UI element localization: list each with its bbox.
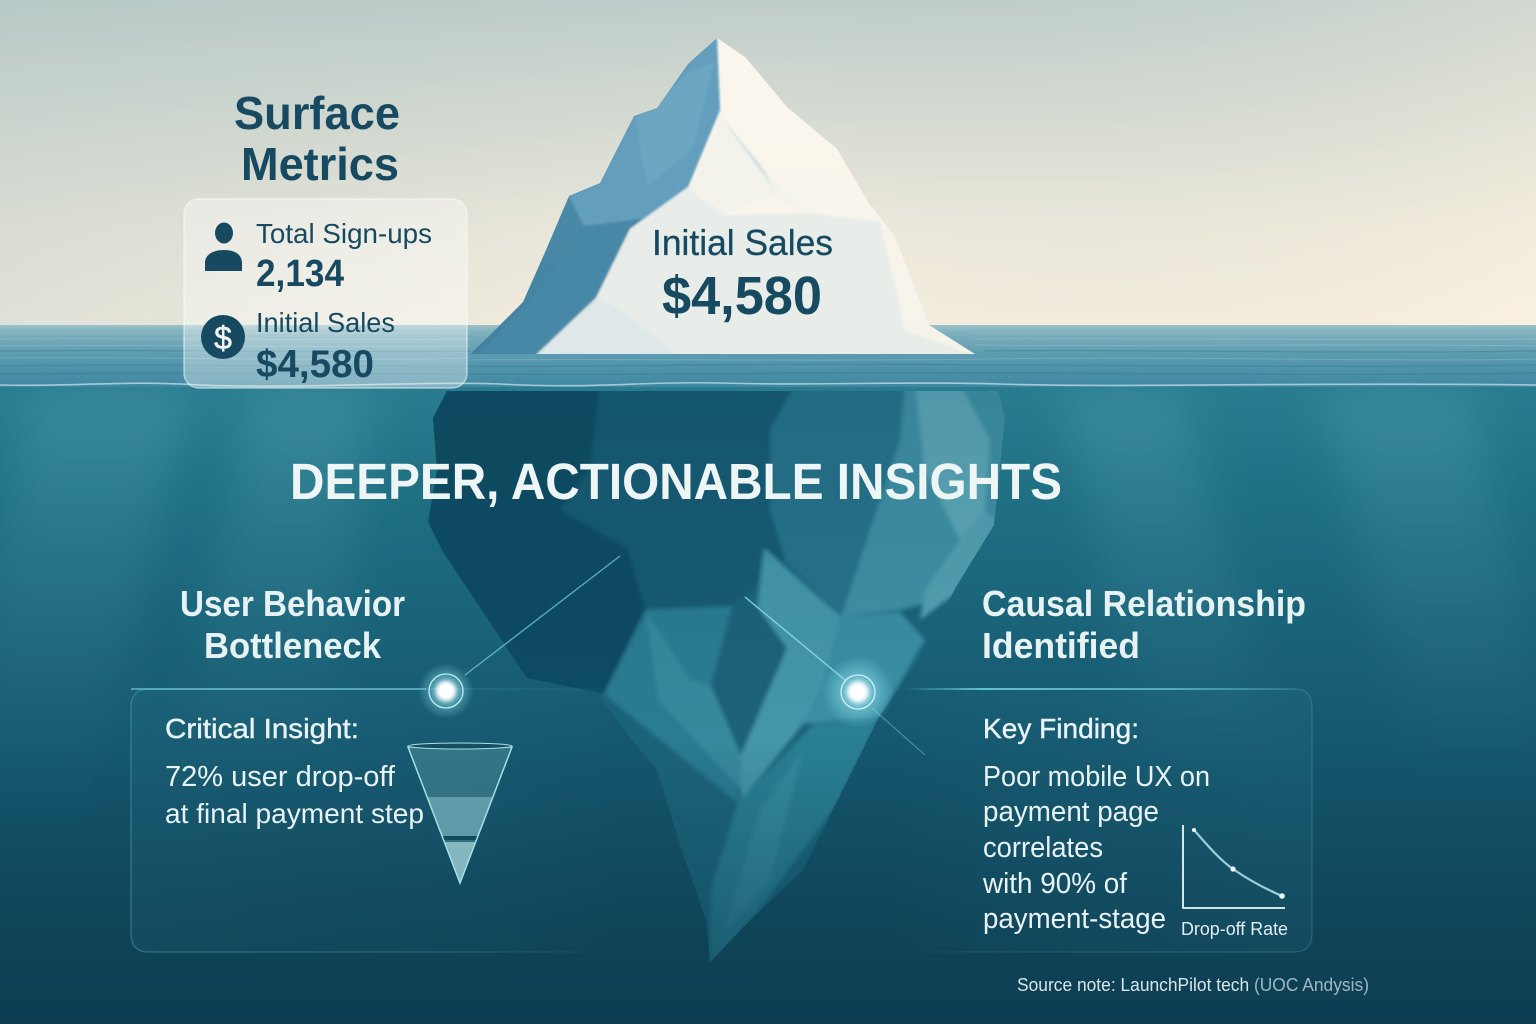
icon: user xyxy=(205,222,242,271)
heading: causal relationship identified xyxy=(982,583,1306,666)
iceberg: below water xyxy=(420,385,1020,975)
heading: user behavior bottleneck xyxy=(180,583,405,666)
iceberg label: initial sales xyxy=(652,222,833,326)
iceberg label: initial sales: $4,580 xyxy=(662,266,822,326)
icon: dollar: $ xyxy=(214,320,232,356)
metric: total sign-ups: Total Sign-ups xyxy=(256,218,432,249)
metric: total sign-ups: 2,134 xyxy=(256,253,344,295)
icon: funnel xyxy=(408,743,512,883)
heading: user behavior bottleneck: Bottleneck xyxy=(204,625,382,666)
heading: causal relationship identified: Causal Relationship xyxy=(982,583,1306,624)
text: key finding: correlates xyxy=(983,832,1103,864)
heading: deeper, actionable insights: DEEPER, ACTIONABLE INSIGHTS xyxy=(290,453,1062,510)
chart: drop-off rate xyxy=(1181,825,1288,939)
metric: initial sales: $4,580 xyxy=(256,343,374,386)
icon: dollar xyxy=(201,315,245,359)
text: critical insight: 72% user drop-off xyxy=(165,761,396,793)
text: key finding: payment-stage xyxy=(983,903,1166,935)
iceberg: above water xyxy=(460,30,975,356)
marker: user behavior connector xyxy=(131,556,620,719)
metric: initial sales xyxy=(256,307,395,386)
panel: key finding xyxy=(890,689,1312,952)
metric: total sign-ups xyxy=(256,218,432,295)
light rays under water xyxy=(0,390,1536,820)
iceberg label: initial sales: Initial Sales xyxy=(652,222,833,263)
text: key finding: Key Finding: xyxy=(983,713,1139,744)
background: deep water xyxy=(0,380,1536,1024)
heading: causal relationship identified: Identified xyxy=(982,625,1140,666)
background: sky xyxy=(0,0,1536,326)
text: critical insight xyxy=(165,713,424,829)
connector line: key finding top edge xyxy=(905,688,1295,690)
panel: surface metrics card xyxy=(184,199,467,388)
source note: Source note: LaunchPilot tech (UOC Andysis) xyxy=(1017,975,1369,995)
heading: Surface Metrics xyxy=(234,87,400,190)
text: key finding: payment page xyxy=(983,796,1159,828)
text: key finding: with 90% of xyxy=(982,868,1128,900)
heading: Surface Metrics: Surface xyxy=(234,87,400,139)
heading: user behavior bottleneck: User Behavior xyxy=(180,583,405,624)
text: critical insight: Critical Insight: xyxy=(165,713,359,744)
chart: drop-off rate: Drop-off Rate xyxy=(1181,919,1288,939)
water line xyxy=(0,383,1536,386)
metric: initial sales: Initial Sales xyxy=(256,307,395,338)
text: critical insight: at final payment step xyxy=(165,798,424,829)
water surface band xyxy=(0,325,1536,387)
panel: critical insight xyxy=(131,689,620,952)
heading: Surface Metrics: Metrics xyxy=(241,138,399,190)
text: key finding: Poor mobile UX on xyxy=(983,761,1210,793)
text: key finding xyxy=(982,713,1210,935)
marker: causal relationship connector xyxy=(745,597,925,755)
